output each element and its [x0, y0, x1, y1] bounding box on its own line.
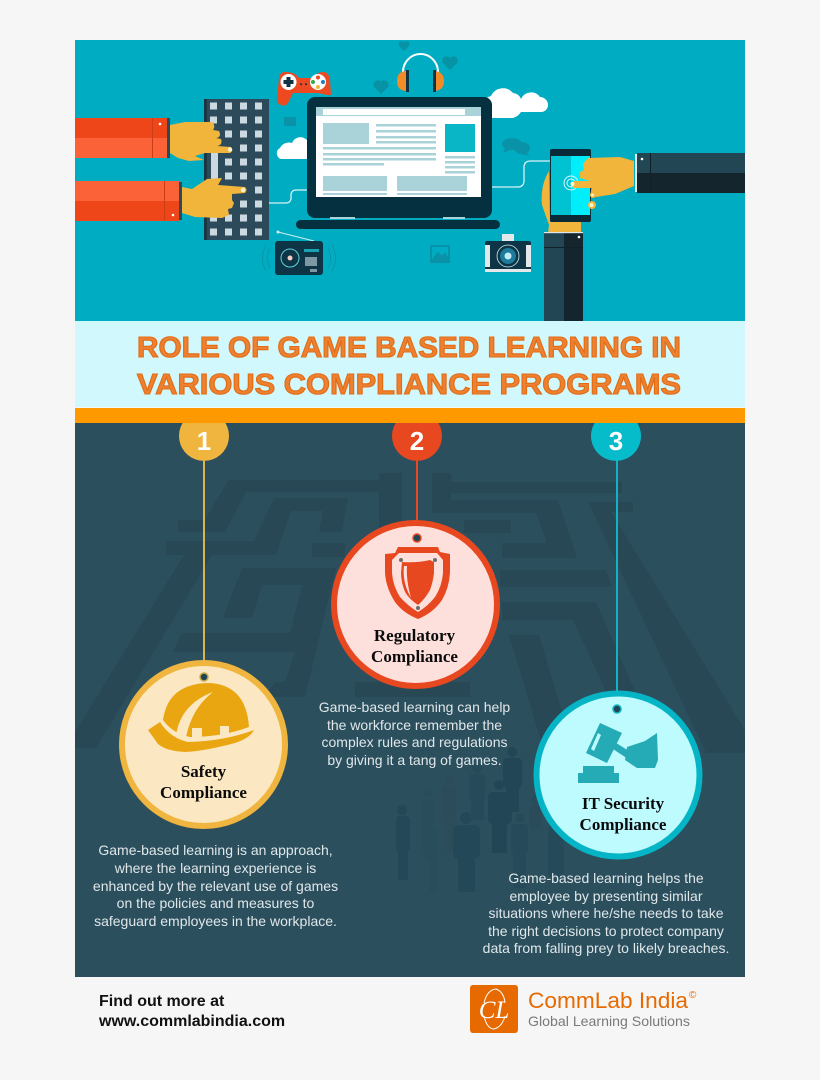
number badge 1: [179, 423, 229, 461]
title: ROLE OF GAME BASED LEARNING IN: [137, 332, 681, 364]
text: safety description: enhanced by the relevant use of games: [93, 878, 338, 894]
left arm bottom: [75, 178, 246, 221]
connector line 1: [203, 460, 205, 672]
logo tagline: Global Learning Solutions: [528, 1013, 690, 1029]
icon: phone: [550, 149, 591, 222]
label: IT security: IT Security: [582, 794, 665, 813]
icon: camera: [485, 234, 531, 272]
label: compliance: Compliance: [371, 647, 458, 666]
number badge 3: 3: [609, 426, 623, 456]
icon: game controller: [277, 72, 331, 106]
footer: call to action: www.commlabindia.com: [98, 1013, 285, 1030]
icon: gavel and hand: [578, 723, 658, 783]
icon: image: [431, 246, 449, 262]
panel: title banner: [75, 321, 745, 407]
right arm and pointing hand: [570, 153, 745, 209]
label: compliance: Compliance: [580, 815, 667, 834]
text: regulatory description: the workforce remember the: [327, 717, 502, 733]
text: IT security description: employee by presenting similar: [510, 888, 703, 904]
icon: radio: [262, 230, 336, 275]
holding hand and arm: [542, 171, 583, 321]
connector line 2: [416, 460, 418, 534]
icon: shield: [385, 547, 450, 619]
footer: call to action: Find out more at: [99, 993, 225, 1010]
connector line 3: [616, 460, 618, 705]
text: regulatory description: complex rules and regulations: [322, 734, 508, 750]
text: IT security description: the right decisions to protect company: [488, 923, 724, 939]
logo name: CommLab India: [528, 988, 689, 1013]
text: safety description: Game-based learning is an approach,: [98, 842, 333, 858]
panel: item 3 IT security compliance: [483, 423, 729, 956]
text: IT security description: situations where he/she needs to take: [488, 905, 724, 921]
icon: hard hat: [148, 683, 254, 752]
number badge 1: 1: [197, 426, 211, 456]
number badge 3: [591, 423, 641, 461]
number badge 2: [392, 423, 442, 461]
title: VARIOUS COMPLIANCE PROGRAMS: [137, 369, 681, 401]
logo mark: [470, 985, 518, 1033]
icon: video: [284, 117, 296, 126]
icon: keyboard: [204, 99, 269, 240]
logo: CommLab India: [470, 985, 697, 1033]
people silhouettes: [396, 747, 564, 892]
circle: IT security: [536, 694, 700, 856]
label: regulatory: Regulatory: [374, 626, 456, 645]
footer: call to action: [98, 993, 285, 1030]
text: safety description: on the policies and measures to: [117, 895, 315, 911]
pin 2: [413, 534, 421, 542]
label: compliance: Compliance: [160, 783, 247, 802]
circle: safety: [122, 663, 285, 826]
panel: main dark background: [75, 423, 745, 977]
text: safety description: safeguard employees in the workplace.: [94, 913, 337, 929]
left arm top: [75, 118, 232, 161]
maze background: [75, 473, 745, 753]
logo mark: CL: [479, 997, 509, 1024]
icon: chat bubbles: [502, 138, 530, 156]
text: IT security description: data from falling prey to likely breaches.: [483, 940, 729, 956]
pin 3: [613, 705, 621, 713]
panel: item 2 regulatory compliance: [319, 423, 510, 768]
title: [137, 332, 681, 401]
text: regulatory description: by giving it a tang of games.: [327, 752, 502, 768]
label: safety: Safety: [181, 762, 227, 781]
text: IT security description: [483, 870, 729, 956]
panel: item 1 safety compliance: [93, 423, 338, 929]
text: IT security description: Game-based learning helps the: [508, 870, 704, 886]
number badge 2: 2: [410, 426, 424, 456]
text: regulatory description: Game-based learning can help: [319, 699, 510, 715]
text: safety description: [93, 842, 338, 929]
circle: regulatory: [334, 523, 497, 686]
copyright mark: ©: [689, 990, 697, 1001]
panel: hero illustration: [75, 40, 745, 321]
text: safety description: where the learning experience is: [114, 860, 316, 876]
pin 1: [200, 673, 208, 681]
icon: clouds: [277, 88, 548, 159]
connector wires: [269, 161, 550, 203]
icon: laptop: [296, 97, 500, 229]
icon: hearts: [373, 41, 458, 94]
icon: headphones: [397, 54, 444, 92]
text: regulatory description: [319, 699, 510, 768]
orange divider: [75, 408, 745, 423]
